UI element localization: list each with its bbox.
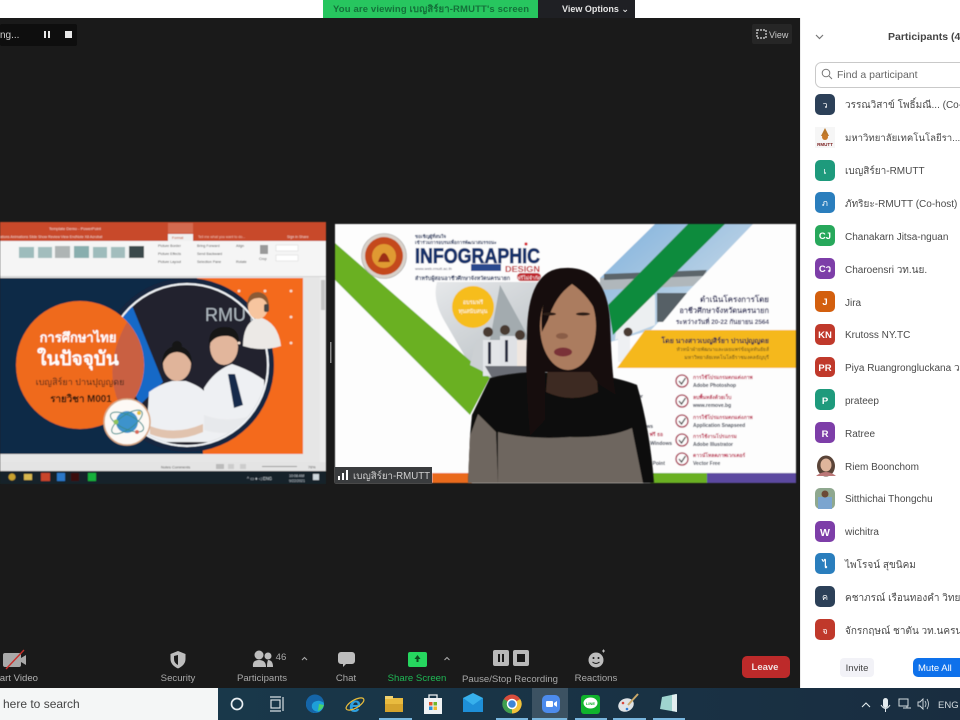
windows taskbar in share: 9/22/2021: [289, 479, 305, 483]
row: thai blue: ไพโรจน์ สุขนิคม: [844, 558, 916, 571]
flyer heading: www.web.rmutt.ac.th: [415, 266, 452, 271]
orange title circle: เบญสิร์ยา ปานปุญญดย: [36, 376, 124, 388]
pause stop recording button: Pause/Stop Recording: [462, 674, 558, 685]
windows search box: here to search: [3, 697, 80, 711]
orange title circle: [16, 301, 144, 429]
student man: [204, 327, 266, 442]
leave button: Leave: [752, 662, 778, 673]
reactions button: [575, 650, 618, 684]
row: wichitra: wichitra: [844, 527, 879, 538]
yellow speaker banner: หัวหน้าฝ่ายพัฒนาและเผยแพร่ข้อมูลทันยัยส์: [677, 346, 769, 353]
background photo band: [436, 224, 753, 380]
checklist: Adobe Illustrator: [693, 442, 733, 448]
start video button: [0, 650, 38, 684]
row: thai red: จ: [822, 626, 828, 636]
powerpoint ribbon: Selection Pane: [197, 260, 221, 264]
row: Sitthichai: [815, 488, 933, 509]
icon: mail: [463, 693, 483, 712]
partly hidden list: Windows: [650, 441, 672, 447]
icon: file explorer: [385, 696, 403, 712]
yellow badge: อบรมฟรี: [463, 299, 483, 306]
top white strip: [0, 0, 960, 18]
green diagonal band: [335, 243, 490, 415]
row: speaker: เ: [823, 166, 827, 176]
photo circle: RMUT: [205, 305, 257, 325]
checklist: Adobe Photoshop: [693, 383, 736, 389]
powerpoint ribbon: [0, 241, 326, 277]
flyer date block: ระหว่างวันที่ 20-22 กันยายน 2564: [676, 316, 769, 326]
checklist: ลบพื้นหลังด้วยเว็บ: [693, 392, 731, 401]
powerpoint ribbon: Crop: [259, 257, 267, 261]
icon: internet explorer: e: [349, 694, 361, 717]
running app underlines: [379, 718, 685, 720]
headset person icon: [243, 292, 281, 349]
row: thai blue: [815, 553, 916, 574]
powerpoint title bar: Format: [172, 236, 183, 240]
students in photo: [470, 325, 632, 378]
row: Ratree: R: [822, 429, 829, 440]
college seal: [362, 234, 406, 278]
view options button: View Options ⌄: [562, 4, 629, 14]
row: wichitra: W: [820, 527, 830, 539]
share screen button: [388, 652, 450, 684]
row: Chanakarn: Chanakarn Jitsa-nguan: [845, 232, 948, 243]
flyer heading: สำหรับผู้สอนอาชีวศึกษาจังหวัดนครนายก: [415, 274, 510, 283]
bottom colour bar: [432, 473, 796, 483]
recording indicator: ng...: [0, 30, 19, 41]
icon: zoom app: [542, 695, 560, 713]
checklist: [676, 374, 753, 467]
security button: [161, 651, 196, 684]
reactions button: Reactions: [575, 673, 618, 684]
presenter back hair: [526, 268, 616, 436]
participants button: Participants: [237, 673, 287, 684]
icon: store: [424, 695, 442, 714]
share screen button: Share Screen: [388, 673, 446, 684]
row: Sitthichai: Sitthichai Thongchu: [845, 494, 933, 505]
yellow badge: [452, 286, 494, 328]
row: Charoensri: Cว: [819, 264, 831, 275]
row: co-host 2: [815, 192, 957, 213]
mute all button: Mute All: [918, 663, 952, 674]
row: Ratree: [815, 422, 875, 443]
invite button: [840, 658, 874, 677]
checklist: Vector Free: [693, 461, 720, 467]
windows taskbar: [218, 688, 960, 720]
powerpoint scrollbar: [320, 277, 326, 462]
orange title circle: รายวิชา M001: [50, 393, 112, 405]
checklist: การใช้โปรแกรมตกแต่งภาพ: [693, 414, 753, 421]
speaker video: [335, 224, 796, 483]
windows taskbar in share: 10:08 AM: [289, 474, 304, 478]
presenter eyes: [542, 312, 590, 316]
row: university logo: [815, 127, 960, 148]
powerpoint title bar: [0, 222, 326, 242]
presenter face: [540, 282, 596, 370]
row: Krutoss: KN: [818, 330, 832, 341]
flyer date block: อาชีวศึกษาจังหวัดนครนายก: [679, 306, 770, 315]
flyer heading: ขอเชิญผู้ที่สนใจ: [415, 233, 446, 240]
security button: Security: [161, 673, 196, 684]
participant list: [815, 94, 960, 640]
row: co-host 2: ภัทริยะ-RMUTT (Co-host): [845, 199, 957, 210]
windows taskbar in share: ^ ▭ ♦ ◁ ENG: [247, 476, 272, 481]
chat button: Chat: [336, 673, 356, 684]
powerpoint title bar: Tell me what you want to do...: [198, 235, 245, 239]
row: Jira: J: [822, 297, 828, 308]
row: Jira: Jira: [845, 298, 862, 309]
icon: paint palette: [616, 694, 638, 714]
presenter nose: [556, 333, 568, 339]
row: co-host 1: ว: [822, 100, 828, 110]
powerpoint title bar: Template Demo - PowerPoint: [49, 226, 102, 231]
row: thai blue: ไ: [821, 558, 828, 571]
presenter gray left sleeve: [468, 414, 498, 483]
checklist: ดาวน์โหลดภาพเวกเตอร์: [693, 452, 745, 459]
row: Piya: PR: [818, 363, 832, 374]
flyer heading: [415, 233, 541, 283]
system tray: [862, 698, 959, 712]
presenter black top: [468, 372, 654, 483]
row: prateep: P: [822, 396, 829, 407]
checklist: www.remove.bg: [692, 403, 731, 409]
participants button: [237, 650, 307, 684]
chat button: [336, 652, 356, 684]
row: prateep: prateep: [845, 396, 879, 407]
powerpoint ribbon: Bring Forward: [197, 244, 220, 248]
row: co-host 2: ภ: [822, 198, 828, 208]
row: thai navy: [815, 586, 960, 607]
row: Charoensri: Charoensri วท.นย.: [845, 265, 927, 276]
banner text: You are viewing เบญสิร์ยา-RMUTT's screen: [333, 3, 529, 15]
row: Riem: Riem Boonchom: [845, 462, 919, 473]
invite button: Invite: [846, 663, 868, 674]
row: thai navy: ค: [822, 592, 828, 602]
powerpoint status bar: [0, 462, 326, 471]
windows taskbar in share: [0, 471, 326, 484]
powerpoint ribbon: Send Backward: [197, 252, 222, 256]
checklist: การใช้งานโปรแกรม: [693, 433, 737, 440]
icon: task view: [270, 697, 283, 711]
powerpoint ribbon: Picture Effects: [158, 252, 181, 256]
icon: cortana: [232, 698, 242, 710]
flyer heading: เข้าร่วมการอบรมเพื่อการพัฒนาสมรรถนะ: [415, 239, 497, 245]
selection handles: [238, 290, 292, 344]
presenter: [468, 268, 654, 483]
powerpoint status bar: 76%: [308, 466, 316, 470]
icon: edge: [306, 695, 324, 713]
powerpoint scrollbar thumb: [321, 280, 325, 310]
yellow speaker banner: [617, 330, 796, 368]
yellow speaker banner: มหาวิทยาลัยเทคโนโลยีราชมงคลธัญบุรี: [684, 354, 769, 361]
shared powerpoint video: [0, 222, 326, 484]
powerpoint ribbon: Picture Layout: [158, 260, 181, 264]
yellow badge: ทุนสนับสนุน: [459, 308, 488, 315]
row: university logo: RMUTT: [817, 142, 833, 147]
participant search box: Find a participant: [837, 69, 918, 81]
presenter fringe: [542, 279, 600, 332]
presenter neck: [546, 366, 598, 398]
row: prateep: [815, 389, 879, 410]
icon: notepad: [660, 694, 677, 712]
participants panel: [800, 18, 960, 688]
screen share banner: [323, 0, 635, 18]
row: Riem: [816, 456, 919, 476]
slide: thai education: [0, 278, 303, 454]
participants header: [816, 31, 960, 43]
speaker video divider: [330, 342, 332, 363]
row: thai red: [815, 619, 960, 640]
atom badge: [104, 399, 150, 445]
zoom highlight: [532, 688, 568, 720]
flyer date block: ดำเนินโครงการโดย: [700, 294, 769, 304]
photo circle: [118, 278, 275, 452]
row: Piya: [815, 357, 960, 377]
checklist: การใช้โปรแกรมตกแต่งภาพ: [693, 374, 753, 381]
dark green diagonal band: [608, 224, 725, 335]
row: speaker: [815, 160, 925, 181]
windows search box: [0, 688, 218, 720]
icon: line: [581, 695, 600, 714]
row: co-host 1: [815, 94, 960, 115]
leave button: [742, 656, 790, 678]
partly hidden list: for: [636, 394, 643, 400]
participant search box: [816, 62, 960, 88]
participants button: 46: [276, 652, 286, 663]
recording indicator: [0, 24, 77, 46]
flyer date block: [676, 294, 770, 326]
checklist: Application Snapseed: [693, 423, 745, 429]
presenter gray blouse: [498, 428, 643, 483]
row: Ratree: Ratree: [845, 429, 875, 440]
presenter mouth: [554, 348, 572, 356]
pause stop recording button: [462, 650, 558, 685]
partly hidden list: Point: [652, 461, 665, 467]
system tray: ENG: [938, 700, 959, 711]
flyer heading: ฟรีไม่จำกัด: [517, 274, 541, 282]
row: Jira: [815, 291, 862, 312]
powerpoint title bar: Sign in Share: [287, 235, 309, 239]
partly hidden list: [636, 394, 672, 467]
view button: [752, 24, 792, 44]
powerpoint ribbon: Picture Border: [158, 244, 182, 248]
row: speaker: เบญสิร์ยา-RMUTT: [845, 165, 925, 177]
meeting toolbar: [0, 640, 800, 688]
orange title circle: ในปัจจุบัน: [37, 347, 119, 371]
view button: View: [769, 30, 789, 40]
powerpoint ribbon: Align: [236, 244, 244, 248]
row: Charoensri: [815, 258, 927, 279]
yellow speaker banner: โดย นางสาวเบญสิร์ยา ปานปุญญดย: [660, 336, 769, 345]
row: Chanakarn: CJ: [819, 231, 831, 242]
row: Krutoss: [815, 324, 910, 345]
student woman: [146, 341, 207, 442]
icon: internet explorer: [344, 694, 366, 717]
row: wichitra: [815, 521, 879, 542]
powerpoint title bar: ations Animations Slide Show Review View EndNote X8 Acrobat: [0, 235, 102, 239]
orange title circle: การศึกษาไทย: [40, 329, 116, 345]
icon: line: LINE: [586, 701, 595, 706]
icon: chrome: [502, 694, 522, 714]
mute all button: [913, 658, 960, 677]
presenter name label: [335, 467, 432, 483]
flyer heading: INFOGRAPHIC: [415, 245, 540, 268]
presenter name label: เบญสิร์ยา-RMUTT: [353, 470, 430, 482]
flyer heading: DESIGN: [505, 265, 540, 274]
powerpoint status bar: Notes Comments: [161, 466, 190, 470]
powerpoint ribbon: Rotate: [236, 260, 247, 264]
row: Krutoss: Krutoss NY.TC: [845, 330, 910, 341]
partly hidden list: dows: [640, 424, 653, 430]
partly hidden list: ฟรี ธอ: [649, 431, 663, 438]
row: Chanakarn: [815, 225, 948, 246]
